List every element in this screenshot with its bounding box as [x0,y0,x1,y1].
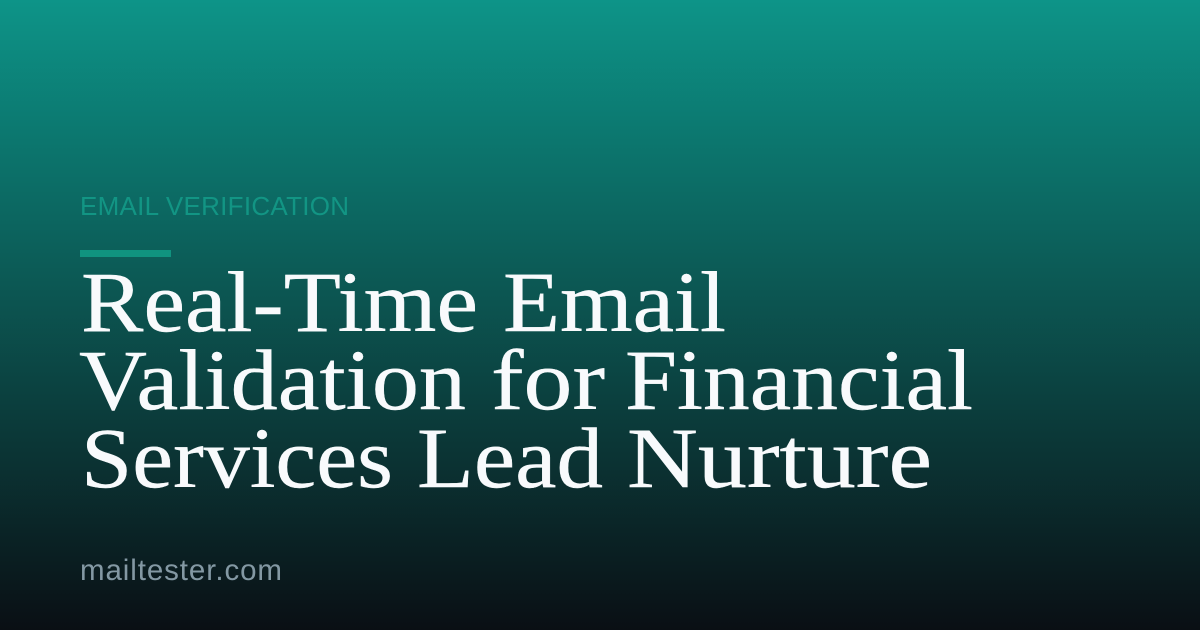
title: Lead [417,410,603,506]
title [79,254,973,506]
accent bar [80,250,171,257]
title: Services [81,410,393,506]
title: Validation [79,332,466,428]
title: Real-Time [81,254,478,350]
category label: EMAIL VERIFICATION [80,191,349,221]
title: Nurture [627,410,932,506]
title: Financial [625,332,973,428]
site name: mailtester.com [80,554,282,587]
title: Email [503,254,726,350]
title: for [491,332,605,428]
